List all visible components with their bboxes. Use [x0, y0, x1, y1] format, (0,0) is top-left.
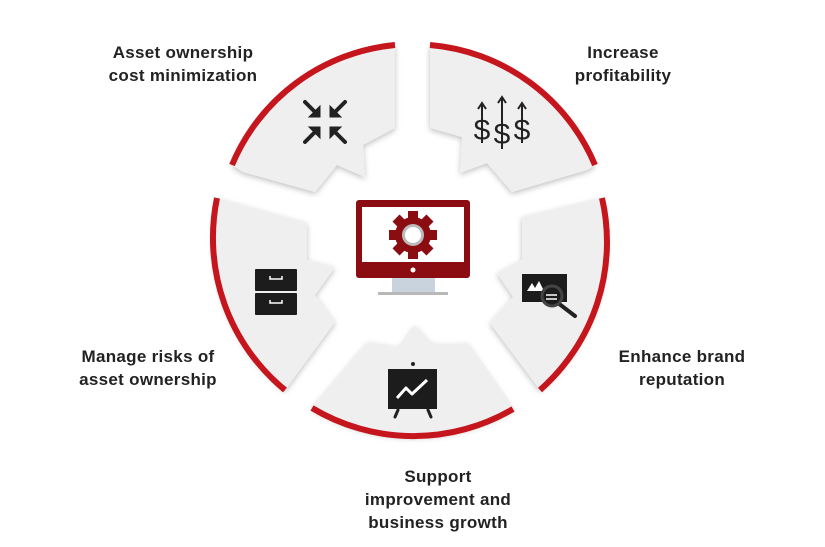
- text: enhance brand: [619, 347, 745, 389]
- text: asset ownership: cost minimization: [109, 66, 257, 85]
- text: support improvement: improvement and: [365, 490, 511, 509]
- icon: dollars with up arrows: $: [494, 118, 511, 151]
- icon: dollars with up arrows: $: [514, 114, 531, 147]
- segment: bottom: [312, 325, 513, 436]
- segment: left: [213, 198, 335, 390]
- text: asset ownership: [109, 43, 257, 85]
- icon: central monitor with gear: [356, 200, 470, 295]
- icon: dollars with up arrows: [474, 97, 531, 151]
- icon: dollars with up arrows: $: [474, 114, 491, 147]
- text: increase profitability: [575, 43, 671, 85]
- text: support improvement: Support: [404, 467, 472, 486]
- icon: compress arrows: [305, 102, 345, 142]
- text: enhance brand: Enhance brand: [619, 347, 745, 366]
- segment: top-right: [430, 45, 595, 192]
- segment: top-left: [232, 45, 395, 192]
- icon: filing drawers: [255, 269, 297, 315]
- text: support improvement: [365, 467, 511, 532]
- text: manage risks: [79, 347, 217, 389]
- text: manage risks: Manage risks of: [82, 347, 214, 366]
- icon: image with magnifier: [522, 274, 575, 316]
- text: increase profitability: profitability: [575, 66, 671, 85]
- text: support improvement: business growth: [368, 513, 508, 532]
- text: enhance brand: reputation: [639, 370, 725, 389]
- segment: right: [490, 198, 607, 390]
- text: manage risks: asset ownership: [79, 370, 217, 389]
- icon: chart easel: [388, 362, 437, 417]
- text: asset ownership: Asset ownership: [113, 43, 253, 62]
- text: increase profitability: Increase: [587, 43, 659, 62]
